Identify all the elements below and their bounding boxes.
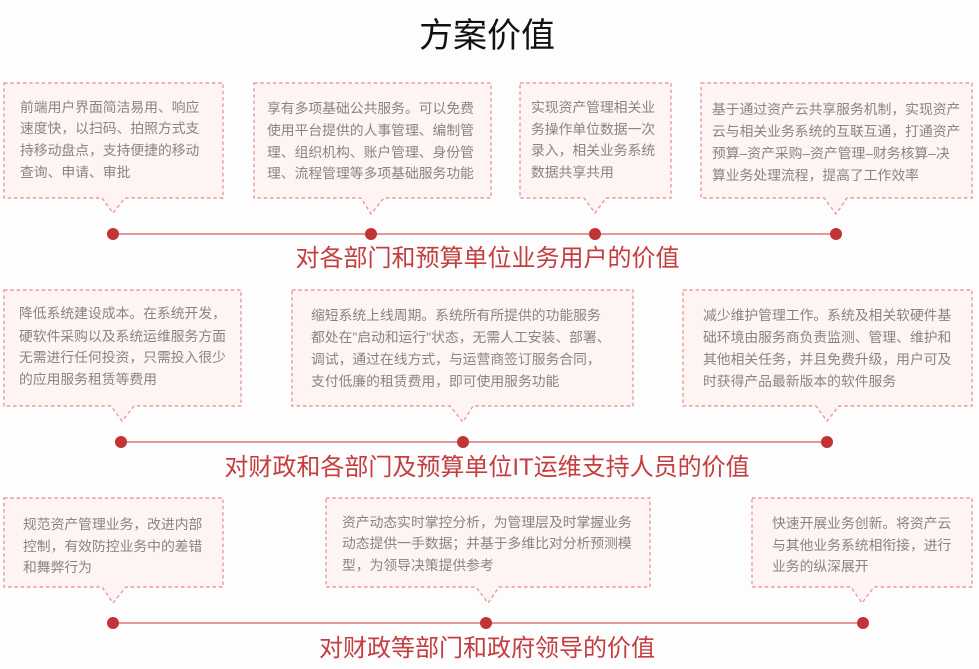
heading: business users value: 对各部门和预算单位业务用户的价值 [296, 245, 680, 272]
panel: shared cloud callout: 算业务处理流程，提高了工作效率 [712, 167, 919, 183]
panel: real-time analysis callout: 型，为领导决策提供参考 [342, 557, 494, 573]
panel: standardize management callout [4, 498, 223, 603]
panel: standardize management callout: 控制，有效防控业务中的差错 [23, 539, 203, 554]
timeline with dots [107, 617, 869, 629]
heading: IT staff value: 对财政和各部门及预算单位IT运维支持人员的价值 [224, 454, 750, 481]
title: 方案价值 [419, 17, 555, 55]
timeline with dots [107, 228, 842, 240]
panel: real-time analysis callout: 动态提供一手数据；并基于多维比对分析预测模 [342, 535, 632, 552]
panel: standardize management callout: 和舞弊行为 [23, 560, 92, 575]
panel: less maintenance callout [683, 290, 972, 421]
panel: lower cost callout: 的应用服务租赁等费用 [19, 371, 157, 387]
panel: public services callout: 使用平台提供的人事管理、编制管 [267, 122, 474, 138]
panel: public services callout [254, 83, 491, 214]
panel: less maintenance callout: 减少维护管理工作。系统及相关软硬件基 [703, 307, 952, 323]
panel: less maintenance callout: 时获得产品最新版本的软件服务 [703, 373, 896, 389]
panel: business innovation callout [752, 498, 972, 603]
panel: lower cost callout: 无需进行任何投资，只需投入很少 [19, 350, 226, 365]
panel: lower cost callout: 降低系统建设成本。在系统开发， [19, 306, 226, 321]
panel: shared cloud callout: 云与相关业务系统的互联互通，打通资产 [712, 123, 960, 139]
panel: front-end callout: 前端用户界面简洁易用、响应 [20, 99, 200, 115]
section 1: business users [4, 83, 972, 272]
panel: shorter launch callout: 缩短系统上线周期。系统所有所提供的功能服务 [311, 308, 601, 323]
panel: public services callout: 理、组织机构、账户管理、身份管 [267, 144, 474, 160]
panel: front-end callout: 持移动盘点，支持便捷的移动 [20, 142, 200, 158]
panel: single data entry callout: 实现资产管理相关业 [531, 100, 655, 115]
panel: single data entry callout: 录入，相关业务系统 [531, 143, 655, 158]
panel: public services callout: 享有多项基础公共服务。可以免费 [267, 100, 474, 116]
panel: less maintenance callout: 础环境由服务商负责监测、管理、维护和 [703, 330, 951, 345]
panel: lower cost callout: 硬软件采购以及系统运维服务方面 [19, 329, 226, 344]
section 2: IT operations staff [4, 290, 972, 481]
panel: shared cloud callout: 基于通过资产云共享服务机制，实现资产 [712, 101, 960, 117]
panel: front-end callout: 查询、申请、审批 [20, 165, 131, 180]
panel: shared cloud callout [701, 83, 972, 214]
section 3: finance departments and leaders [4, 498, 972, 662]
panel: single data entry callout: 数据共享共用 [531, 164, 614, 180]
panel: business innovation callout: 快速开展业务创新。将资产云 [772, 516, 952, 531]
panel: single data entry callout: 务操作单位数据一次 [531, 122, 655, 137]
panel: lower cost callout [4, 290, 241, 421]
panel: less maintenance callout: 其他相关任务，并且免费升级，用户可及 [703, 351, 952, 367]
panel: shorter launch callout: 都处在"启动和运行"状态，无需人工安装、部署、 [311, 330, 611, 345]
panel: public services callout: 理、流程管理等多项基础服务功能 [267, 165, 474, 181]
panel: single data entry callout [520, 83, 671, 213]
panel: shorter launch callout: 支付低廉的租赁费用，即可使用服务功能 [311, 373, 560, 389]
panel: shorter launch callout [292, 290, 633, 422]
panel: standardize management callout: 规范资产管理业务，改进内部 [23, 516, 203, 532]
panel: real-time analysis callout: 资产动态实时掌控分析，为管理层及时掌握业务 [342, 515, 632, 530]
panel: front-end callout: 速度快，以扫码、拍照方式支 [20, 121, 200, 136]
panel: real-time analysis callout [326, 498, 650, 603]
panel: business innovation callout: 业务的纵深展开 [772, 559, 869, 574]
panel: shorter launch callout: 调试，通过在线方式，与运营商签订服务合同， [311, 351, 601, 367]
timeline with dots [115, 436, 833, 448]
panel: front-end callout [4, 83, 223, 213]
panel: business innovation callout: 与其他业务系统相衔接，进行 [772, 537, 952, 553]
panel: shared cloud callout: 预算–资产采购–资产管理–财务核算–决 [712, 146, 950, 161]
heading: finance and leaders value: 对财政等部门和政府领导的价值 [319, 635, 655, 662]
